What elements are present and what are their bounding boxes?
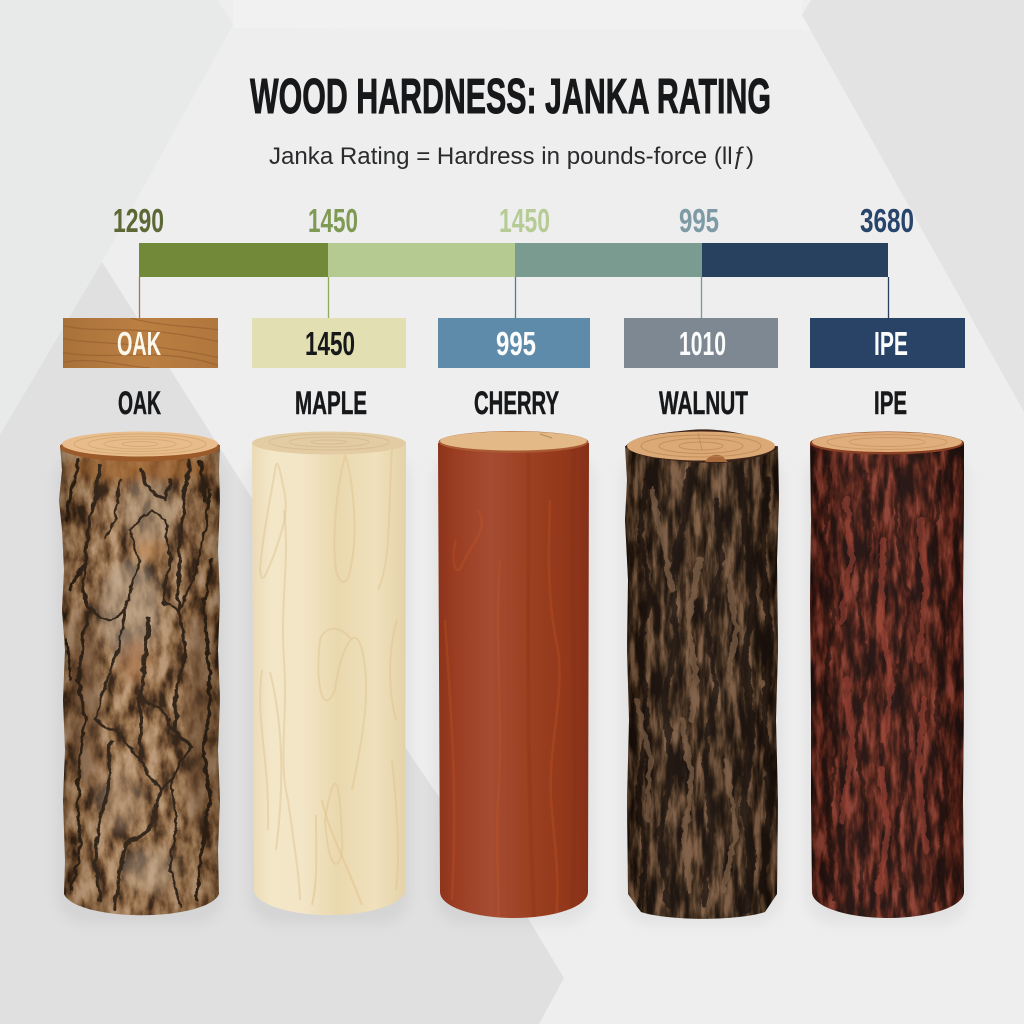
species labels: IPE	[874, 385, 907, 421]
value box: ipe	[810, 318, 965, 368]
value box: ipe: IPE	[874, 325, 908, 362]
species labels: CHERRY	[474, 385, 559, 421]
scale values: 1450	[308, 202, 358, 239]
log: maple	[250, 430, 410, 930]
species labels: OAK	[118, 385, 161, 421]
species labels	[118, 385, 907, 421]
value box: cherry: 995	[496, 325, 536, 362]
scale values	[113, 202, 914, 239]
log: oak	[59, 432, 220, 916]
scale values: 995	[679, 202, 719, 239]
value box: walnut: 1010	[679, 325, 726, 362]
scale values: 1450	[499, 202, 550, 239]
value box: walnut	[624, 318, 778, 368]
soft shadows behind logs	[56, 450, 968, 924]
value box: maple: 1450	[305, 325, 355, 362]
value box: maple	[252, 318, 406, 368]
scale values: 1290	[113, 202, 164, 239]
leader lines	[140, 277, 888, 318]
log: cherry	[436, 430, 592, 930]
species labels: MAPLE	[295, 385, 367, 421]
value box: oak: OAK	[117, 325, 161, 362]
scale values: 3680	[860, 202, 914, 239]
log: walnut	[625, 429, 779, 919]
value box: cherry	[438, 318, 590, 368]
species labels: WALNUT	[659, 385, 748, 421]
subtitle: Janka Rating = Hardress in pounds-force (llƒ)	[269, 143, 754, 170]
value box: oak	[60, 318, 220, 368]
log: ipe	[810, 432, 964, 918]
hardness scale bar	[139, 243, 888, 277]
